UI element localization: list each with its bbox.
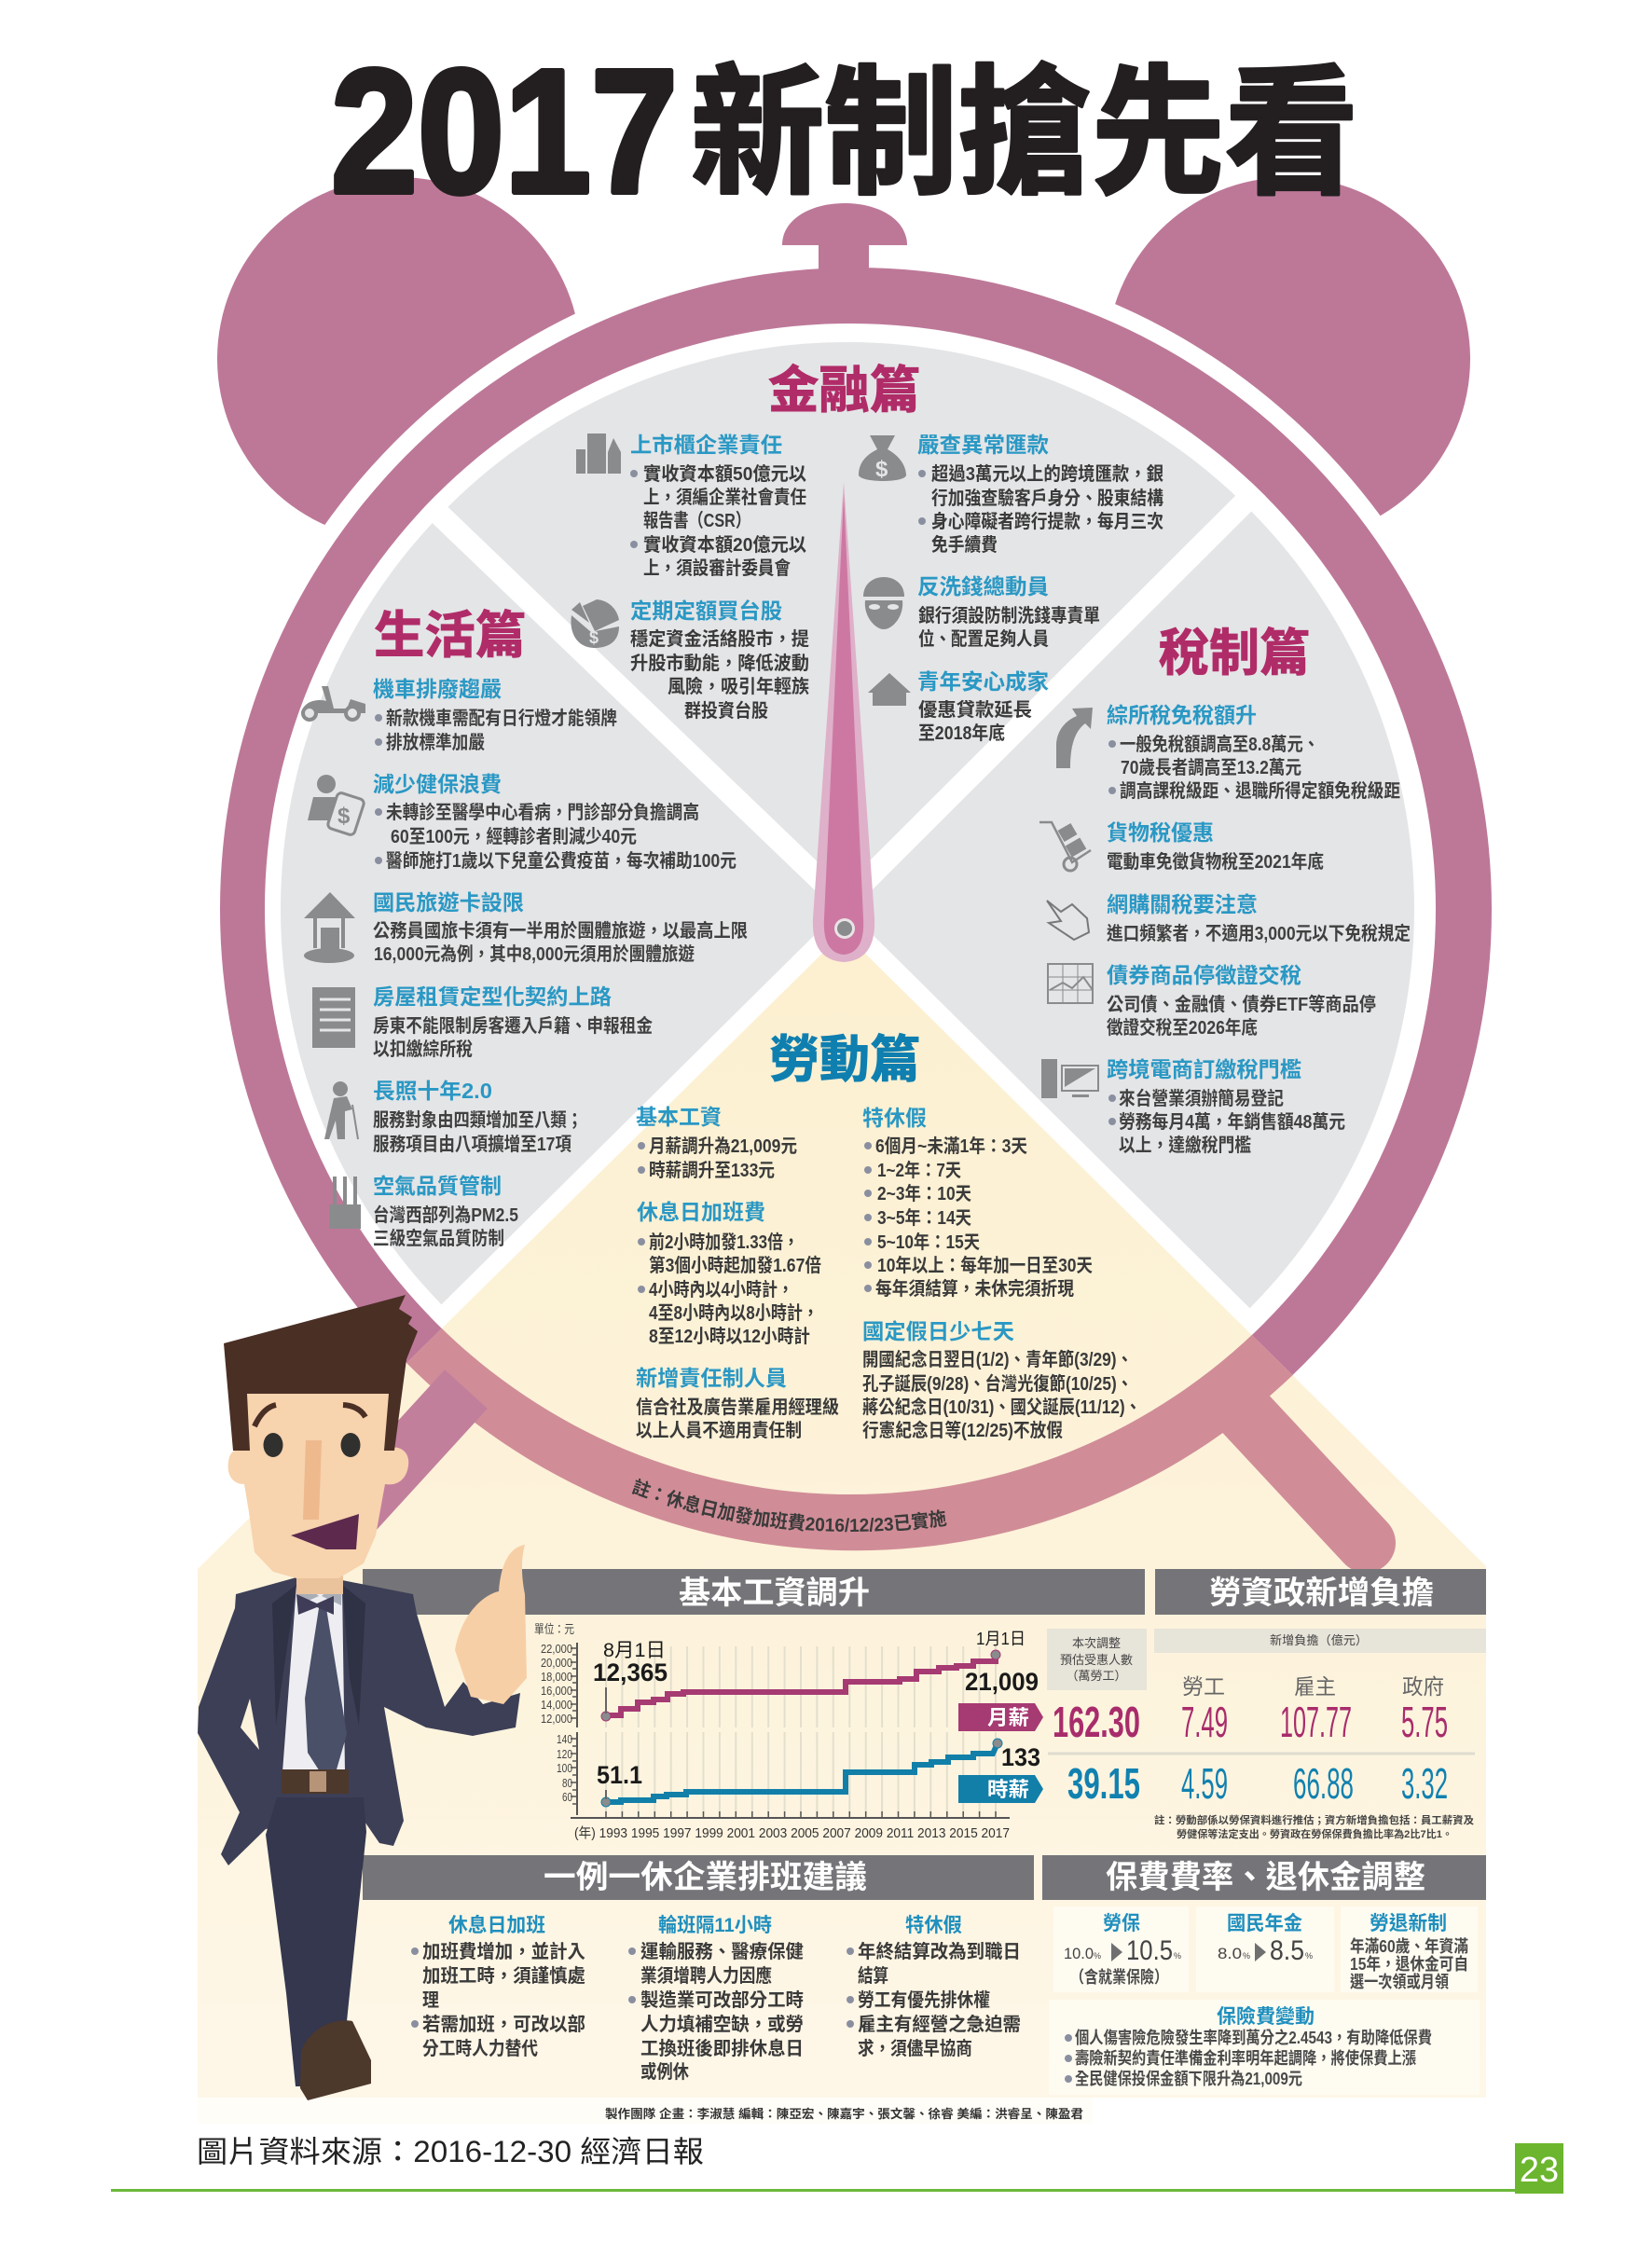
item: income tax <box>1107 703 1400 802</box>
clock ring <box>220 268 1492 1550</box>
monthly burden values <box>1181 1698 1448 1746</box>
header bar: burden: 勞資政新增負擔 <box>1209 1576 1434 1611</box>
title: 新制搶先看 <box>691 55 1358 212</box>
column labels: 政府 <box>1402 1674 1444 1699</box>
item: travel card: 公務員國旅卡須有一半用於團體旅遊，以最高上限 <box>373 919 748 942</box>
item: young home buyers: 青年安心成家 <box>917 669 1049 694</box>
panel: finance <box>571 363 1163 744</box>
line chart: wages: 14,000 <box>541 1698 572 1712</box>
column: annual leave: 結算 <box>858 1964 888 1987</box>
column: rest day overtime <box>411 1914 585 2059</box>
collar <box>296 1577 342 1605</box>
sub header: burden unit <box>1154 1629 1486 1653</box>
box: labour insurance: % <box>1094 1951 1101 1961</box>
box: insurance premium changes: 保險費變動 <box>1217 2005 1315 2028</box>
mouth <box>291 1514 359 1549</box>
box: new pension: 勞退新制 <box>1370 1912 1447 1934</box>
header bar: burden <box>1155 1569 1486 1615</box>
icon: elder with cane <box>324 1081 358 1139</box>
item: commodity tax <box>1107 820 1324 873</box>
box: beneficiaries header: 本次調整 <box>1072 1636 1121 1650</box>
page number <box>1515 2143 1563 2194</box>
white gap around clock <box>202 250 1509 1568</box>
line chart: wages: (年) 1993 1995 1997 1999 2001 2003 2005 2007 2009 2011 2013 2015 2017 <box>574 1825 1010 1841</box>
item: remittance checks: 嚴查異常匯款 <box>917 433 1049 457</box>
icon: computer <box>1041 1059 1098 1098</box>
line chart: wages: 120 <box>557 1747 572 1761</box>
item: annual leave: 10年以上：每年加一日至30天 <box>877 1255 1093 1276</box>
box: insurance premium changes <box>1065 2005 1432 2088</box>
item: bond securities tax: 債券商品停徵證交稅 <box>1107 963 1301 987</box>
heading: tax: 稅制篇 <box>1159 626 1310 681</box>
item: travel card: 16,000元為例，其中8,000元須用於團體旅遊 <box>374 943 695 965</box>
column: shift interval: 或例休 <box>640 2060 689 2083</box>
item: anti money laundering: 反洗錢總動員 <box>917 574 1049 599</box>
item: rest day overtime: 第3個小時起加發1.67倍 <box>649 1254 821 1276</box>
item: income tax: 70歲長者調高至13.2萬元 <box>1121 756 1301 778</box>
character: businessman thumbs up <box>198 1295 527 2100</box>
column: shift interval: 運輸服務、醫療保健 <box>640 1941 804 1962</box>
box: new pension: 15年，退休金可自 <box>1350 1954 1468 1974</box>
item: responsibility system <box>636 1366 839 1441</box>
item: annual leave: 1~2年：7天 <box>877 1160 961 1181</box>
header bar: premium: 保費費率、退休金調整 <box>1106 1860 1425 1895</box>
column: shift interval: 工換班後即排休息日 <box>640 2037 804 2059</box>
icon: pie with dollar <box>571 599 619 648</box>
column: annual leave: 雇主有經營之急迫需 <box>858 2013 1021 2035</box>
item: online shopping tax <box>1107 892 1411 944</box>
item: bond securities tax <box>1107 963 1376 1039</box>
icon: buildings <box>576 434 621 474</box>
column: annual leave: 求，須儘早協商 <box>858 2037 972 2059</box>
line chart: wages: 133 <box>1001 1743 1040 1771</box>
header bar: scheduling <box>363 1855 1034 1900</box>
line chart: wages: 單位：元 <box>534 1622 574 1636</box>
panel: one fixed one flexible day off scheduling <box>363 1855 1034 2083</box>
sub header: burden unit: 新增負擔（億元） <box>1270 1633 1368 1647</box>
item: regular investment: 風險，吸引年輕族 <box>668 675 809 697</box>
icon: factory chimneys <box>329 1177 361 1229</box>
item: income tax: 綜所稅免稅額升 <box>1107 703 1257 727</box>
item: online shopping tax: 進口頻繁者，不適用3,000元以下免稅規定 <box>1107 922 1411 944</box>
icon: person and coin: $ <box>337 804 351 829</box>
item: remittance checks: 行加強查驗客戶身分、股東結構 <box>931 487 1163 509</box>
icon: rising arrow <box>1056 708 1093 768</box>
item: air quality: 三級空氣品質防制 <box>373 1227 504 1249</box>
item: scooter emissions: 排放標準加嚴 <box>386 732 485 753</box>
burden footnote <box>1154 1813 1474 1840</box>
item: health insurance: 60至100元，經轉診者則減少40元 <box>391 825 637 847</box>
line chart: wages <box>534 1622 1040 1841</box>
credits: 製作團隊 企畫：李淑慧 編輯：陳亞宏、陳嘉宇、張文馨、徐睿 美編：洪睿呈、陳盈君 <box>605 2107 1083 2121</box>
head <box>228 1394 408 1578</box>
item: travel card <box>373 890 748 965</box>
item: listed company duties: 上市櫃企業責任 <box>630 433 782 457</box>
heading: finance: 金融篇 <box>768 363 920 419</box>
clock body <box>177 177 1510 2124</box>
item: regular investment: 定期定額買台股 <box>630 599 782 623</box>
column: rest day overtime: 分工時人力替代 <box>422 2038 538 2059</box>
value: monthly beneficiaries: 162.30 <box>1053 1698 1140 1746</box>
icon: line chart table <box>1048 964 1093 1003</box>
icon: carousel <box>304 892 355 963</box>
box: new pension: 年滿60歲、年資滿 <box>1350 1936 1468 1956</box>
header bar: premium <box>1042 1855 1486 1900</box>
box: labour insurance: 勞保 <box>1103 1913 1140 1934</box>
hourly burden values: 3.32 <box>1401 1759 1448 1808</box>
item: scooter emissions: 新款機車需配有日行燈才能領牌 <box>386 707 617 729</box>
item: rental contract: 房屋租賃定型化契約上路 <box>373 984 612 1009</box>
item: young home buyers: 至2018年底 <box>918 722 1005 744</box>
box: insurance premium changes: 個人傷害險危險發生率降到萬分之2.4543，有助降低保費 <box>1075 2028 1432 2047</box>
line chart: wages: 140 <box>557 1732 572 1746</box>
nose <box>303 1440 322 1520</box>
sector dividers <box>420 481 1266 1335</box>
line chart: wages: 20,000 <box>541 1656 572 1670</box>
item: remittance checks: 身心障礙者跨行提款，每月三次 <box>931 511 1163 532</box>
burden footnote: 勞健保等法定支出。勞資政在勞保保費負擔比率為2比7比1。 <box>1177 1827 1452 1840</box>
item: rest day overtime: 前2小時加發1.33倍， <box>649 1231 799 1253</box>
item: responsibility system: 信合社及廣告業雇用經理級 <box>636 1397 839 1418</box>
item: young home buyers: 優惠貸款延長 <box>918 698 1032 721</box>
line chart: wages: 16,000 <box>541 1684 572 1698</box>
line chart: wages: 100 <box>557 1761 572 1775</box>
hourly burden values: 4.59 <box>1181 1759 1228 1808</box>
item: rest day overtime <box>637 1200 821 1347</box>
eyebrows <box>255 1405 365 1426</box>
panel: labour <box>632 1032 1141 1533</box>
icon: scooter <box>303 686 365 720</box>
item: basic wage: 時薪調升至133元 <box>649 1160 775 1181</box>
label: monthly wage <box>958 1703 1043 1731</box>
title: 2017 <box>331 34 678 230</box>
faint footer area <box>198 2098 1093 2124</box>
icon: top knob <box>782 203 907 275</box>
item: air quality: 空氣品質管制 <box>373 1174 502 1198</box>
item: young home buyers <box>917 669 1049 744</box>
item: annual leave: 5~10年：15天 <box>877 1232 980 1253</box>
box: labour insurance: 10.5 <box>1126 1935 1173 1966</box>
icon: person and coin <box>308 775 365 836</box>
item: anti money laundering: 位、配置足夠人員 <box>918 627 1049 650</box>
box: national pension: % <box>1305 1951 1313 1961</box>
item: national holidays: 國定假日少七天 <box>862 1319 1014 1343</box>
box: national pension: % <box>1243 1951 1250 1961</box>
icon: money bag <box>859 435 906 482</box>
item: income tax: 調高課稅級距、退職所得定額免稅級距 <box>1120 779 1400 802</box>
item: air quality: 台灣西部列為PM2.5 <box>373 1204 518 1226</box>
monthly burden values: 7.49 <box>1181 1698 1228 1746</box>
item: annual leave <box>862 1106 1093 1300</box>
clock hand <box>813 482 874 962</box>
item: scooter emissions: 機車排廢趨嚴 <box>373 677 502 701</box>
item: basic wage: 基本工資 <box>636 1105 722 1129</box>
page number: 23 <box>1520 2151 1559 2190</box>
item: rest day overtime: 4至8小時內以8小時計， <box>649 1301 819 1324</box>
column: shift interval: 業須增聘人力因應 <box>640 1964 772 1987</box>
value: hourly beneficiaries: 39.15 <box>1067 1759 1140 1808</box>
item: remittance checks: 超過3萬元以上的跨境匯款，銀 <box>931 462 1163 485</box>
panel: basic wage chart <box>363 1569 1147 1841</box>
item: annual leave: 3~5年：14天 <box>877 1207 971 1229</box>
line chart: wages: 22,000 <box>541 1642 572 1656</box>
item: health insurance: 減少健保浪費 <box>373 772 502 796</box>
footer rule <box>111 2189 1515 2192</box>
box: national pension: 8.5 <box>1270 1935 1304 1966</box>
item: listed company duties: 實收資本額20億元以 <box>643 533 806 556</box>
box: national pension: 國民年金 <box>1227 1912 1302 1934</box>
cream labour sector and roof <box>198 932 1486 2098</box>
column labels <box>1182 1674 1444 1699</box>
box: insurance premium changes: 壽險新契約責任準備金利率明年起調降，將使保費上漲 <box>1075 2048 1416 2068</box>
column labels: 勞工 <box>1182 1674 1225 1699</box>
line chart: wages: 80 <box>562 1776 572 1790</box>
icon: pie with dollar: $ <box>589 628 599 647</box>
item: regular investment: 升股市動能，降低波動 <box>630 652 809 674</box>
column: rest day overtime: 理 <box>422 1990 439 2011</box>
column: shift interval: 輪班隔11小時 <box>658 1914 772 1936</box>
box: new pension: 選一次領或月領 <box>1350 1972 1449 1991</box>
monthly burden values: 107.77 <box>1280 1698 1352 1746</box>
item: annual leave: 6個月~未滿1年：3天 <box>875 1135 1027 1157</box>
item: health insurance: 醫師施打1歲以下兒童公費疫苗，每次補助100元 <box>386 849 737 872</box>
shirt <box>282 1585 345 1772</box>
item: anti money laundering: 銀行須設防制洗錢專責單 <box>918 604 1100 626</box>
item: scooter emissions <box>373 677 617 753</box>
item: air quality <box>373 1174 518 1249</box>
box: new pension <box>1350 1912 1468 1991</box>
item: basic wage: 月薪調升為21,009元 <box>649 1135 797 1157</box>
label: monthly wage: 月薪 <box>987 1706 1029 1729</box>
item: long term care: 服務項目由八項擴增至17項 <box>373 1134 571 1155</box>
burden footnote: 註：勞動部係以勞保資料進行推估；資方新增負擔包括：員工薪資及 <box>1154 1813 1474 1826</box>
item: remittance checks: 免手續費 <box>931 534 998 556</box>
bow tie <box>296 1594 334 1615</box>
line chart: wages: 21,009 <box>965 1668 1039 1696</box>
item: national holidays <box>862 1319 1141 1441</box>
box: beneficiaries header: 預估受惠人數 <box>1060 1653 1133 1667</box>
item: rental contract: 房東不能限制房客遷入戶籍、申報租金 <box>373 1014 653 1037</box>
item: bond securities tax: 公司債、金融債、債券ETF等商品停 <box>1107 993 1376 1015</box>
panel: tax <box>1039 626 1411 1156</box>
item: rental contract <box>373 984 653 1060</box>
column: annual leave: 年終結算改為到職日 <box>858 1940 1021 1962</box>
neck <box>296 1566 343 1594</box>
label: hourly wage: 時薪 <box>987 1778 1029 1801</box>
item: cross border e-commerce: 跨境電商訂繳稅門檻 <box>1107 1057 1301 1081</box>
item: anti money laundering <box>917 574 1100 650</box>
header bar: basic wage: 基本工資調升 <box>679 1576 870 1611</box>
header bar: scheduling: 一例一休企業排班建議 <box>544 1860 867 1895</box>
item: cross border e-commerce: 來台營業須辦簡易登記 <box>1119 1087 1284 1109</box>
item: cross border e-commerce: 勞務每月4萬，年銷售額48萬元 <box>1119 1111 1345 1133</box>
item: remittance checks <box>917 433 1163 556</box>
item: long term care: 服務對象由四類增加至八類； <box>373 1108 583 1131</box>
item: national holidays: 開國紀念日翌日(1/2)、青年節(3/29)、 <box>862 1348 1133 1370</box>
tie <box>305 1608 347 1789</box>
column: annual leave: 特休假 <box>905 1915 962 1936</box>
pale sub boxes <box>1049 1906 1480 2095</box>
panel: new burden <box>1048 1569 1486 1840</box>
item: travel card: 國民旅遊卡設限 <box>373 890 524 915</box>
item: national holidays: 行憲紀念日等(12/25)不放假 <box>862 1419 1063 1441</box>
line chart: wages: 18,000 <box>541 1670 572 1684</box>
header bar: basic wage <box>363 1569 1145 1615</box>
item: commodity tax: 貨物稅優惠 <box>1107 820 1214 845</box>
hourly burden values <box>1181 1759 1448 1808</box>
shoe <box>300 2020 371 2100</box>
column: shift interval: 製造業可改部分工時 <box>640 1989 804 2011</box>
item: annual leave: 2~3年：10天 <box>877 1183 971 1204</box>
icon: hand truck <box>1039 822 1091 871</box>
item: responsibility system: 新增責任制人員 <box>636 1366 787 1390</box>
hourly burden values: 66.88 <box>1293 1759 1354 1808</box>
item: regular investment: 群投資台股 <box>684 699 768 722</box>
item: long term care: 長照十年2.0 <box>373 1079 492 1103</box>
item: rest day overtime: 4小時內以4小時計， <box>649 1278 793 1301</box>
belt <box>282 1769 349 1794</box>
icon: pointing hand <box>1047 901 1089 940</box>
left clock leg <box>317 1389 466 1552</box>
clock face sectors <box>281 342 1414 1476</box>
jacket <box>198 1577 520 1865</box>
icon: right bell <box>1107 177 1470 541</box>
monthly burden values: 5.75 <box>1401 1698 1448 1746</box>
icon: house <box>868 673 911 706</box>
box: labour insurance: % <box>1174 1951 1181 1961</box>
box: beneficiaries header <box>1047 1629 1147 1690</box>
icon: contract document <box>312 987 355 1048</box>
right clock leg <box>1240 1408 1366 1543</box>
item: income tax: 一般免稅額調高至8.8萬元、 <box>1120 733 1319 755</box>
column: annual leave: 勞工有優先排休權 <box>858 1989 990 2011</box>
hair <box>224 1295 418 1451</box>
item: responsibility system: 以上人員不適用責任制 <box>636 1419 802 1441</box>
box: labour insurance: （含就業保險） <box>1070 1967 1168 1987</box>
box: beneficiaries header: （萬勞工） <box>1066 1669 1127 1683</box>
column: rest day overtime: 加班工時，須謹慎處 <box>422 1965 585 1987</box>
item: rest day overtime: 8至12小時以12小時計 <box>649 1325 810 1347</box>
source caption: 圖片資料來源：2016-12-30 經濟日報 <box>197 2135 704 2168</box>
item: basic wage <box>636 1105 797 1181</box>
item: rest day overtime: 休息日加班費 <box>637 1200 765 1224</box>
curved note on ring: 註：休息日加發加班費2016/12/23已實施 <box>632 1479 947 1533</box>
box: national pension <box>1218 1912 1313 1966</box>
icon: left bell <box>217 177 581 541</box>
line chart: wages: 51.1 <box>597 1761 642 1789</box>
ring band over the cream <box>406 1328 1292 1551</box>
title <box>331 34 1358 230</box>
panel: life <box>303 608 748 1249</box>
box: national pension: 8.0 <box>1218 1945 1242 1962</box>
item: annual leave: 特休假 <box>862 1106 927 1130</box>
icon: masked thief <box>863 577 904 629</box>
panel: premium rates and pension <box>1042 1855 1486 2095</box>
column: rest day overtime: 加班費增加，並計入 <box>422 1940 585 1962</box>
column: shift interval: 人力填補空缺，或勞 <box>640 2013 804 2035</box>
heading: labour: 勞動篇 <box>769 1032 920 1088</box>
item: listed company duties: 上，須編企業社會責任 <box>643 486 806 508</box>
item: long term care <box>373 1079 583 1155</box>
heading: life: 生活篇 <box>374 608 526 664</box>
item: cross border e-commerce: 以上，達繳稅門檻 <box>1119 1135 1251 1156</box>
line chart: wages: 60 <box>562 1790 572 1804</box>
item: regular investment: 穩定資金活絡股市，提 <box>630 627 809 650</box>
column: shift interval <box>628 1914 804 2083</box>
item: health insurance: 未轉診至醫學中心看病，門診部分負擔調高 <box>386 801 699 823</box>
hand and thumb <box>455 1545 527 1704</box>
item: listed company duties: 上，須設審計委員會 <box>643 557 791 579</box>
box: insurance premium changes: 全民健保投保金額下限升為21,009元 <box>1075 2069 1302 2088</box>
ring inner gap <box>265 323 1436 1494</box>
box: labour insurance <box>1064 1913 1181 1987</box>
item: cross border e-commerce <box>1107 1057 1345 1156</box>
item: online shopping tax: 網購關稅要注意 <box>1107 892 1258 916</box>
line chart: wages: 8月1日 <box>603 1640 666 1661</box>
column: rest day overtime: 若需加班，可改以部 <box>422 2014 585 2035</box>
icon: money bag: $ <box>875 457 888 482</box>
lapels <box>272 1585 365 1725</box>
label: hourly wage <box>958 1775 1043 1803</box>
column: rest day overtime: 休息日加班 <box>448 1914 545 1936</box>
item: health insurance <box>373 772 737 872</box>
line chart: wages: 1月1日 <box>976 1630 1026 1648</box>
trousers <box>266 1797 366 2086</box>
item: commodity tax: 電動車免徵貨物稅至2021年底 <box>1107 850 1324 873</box>
item: rental contract: 以扣繳綜所稅 <box>373 1039 473 1060</box>
item: regular investment <box>630 599 809 722</box>
item: national holidays: 孔子誕辰(9/28)、台灣光復節(10/25)、 <box>862 1372 1133 1395</box>
item: listed company duties: 報告書（CSR） <box>643 510 750 531</box>
line chart: wages: 12,365 <box>593 1658 668 1686</box>
item: annual leave: 每年須結算，未休完須折現 <box>875 1277 1074 1300</box>
item: bond securities tax: 徵證交稅至2026年底 <box>1107 1016 1258 1039</box>
item: listed company duties <box>630 433 806 579</box>
eyes <box>263 1433 360 1457</box>
arm gap <box>241 1699 259 1750</box>
column labels: 雇主 <box>1294 1674 1336 1699</box>
box: labour insurance: 10.0 <box>1064 1945 1094 1962</box>
line chart: wages: 12,000 <box>541 1712 572 1726</box>
item: listed company duties: 實收資本額50億元以 <box>643 462 806 485</box>
item: national holidays: 蔣公紀念日(10/31)、國父誕辰(11/12)、 <box>862 1396 1141 1418</box>
column: annual leave <box>847 1915 1021 2059</box>
